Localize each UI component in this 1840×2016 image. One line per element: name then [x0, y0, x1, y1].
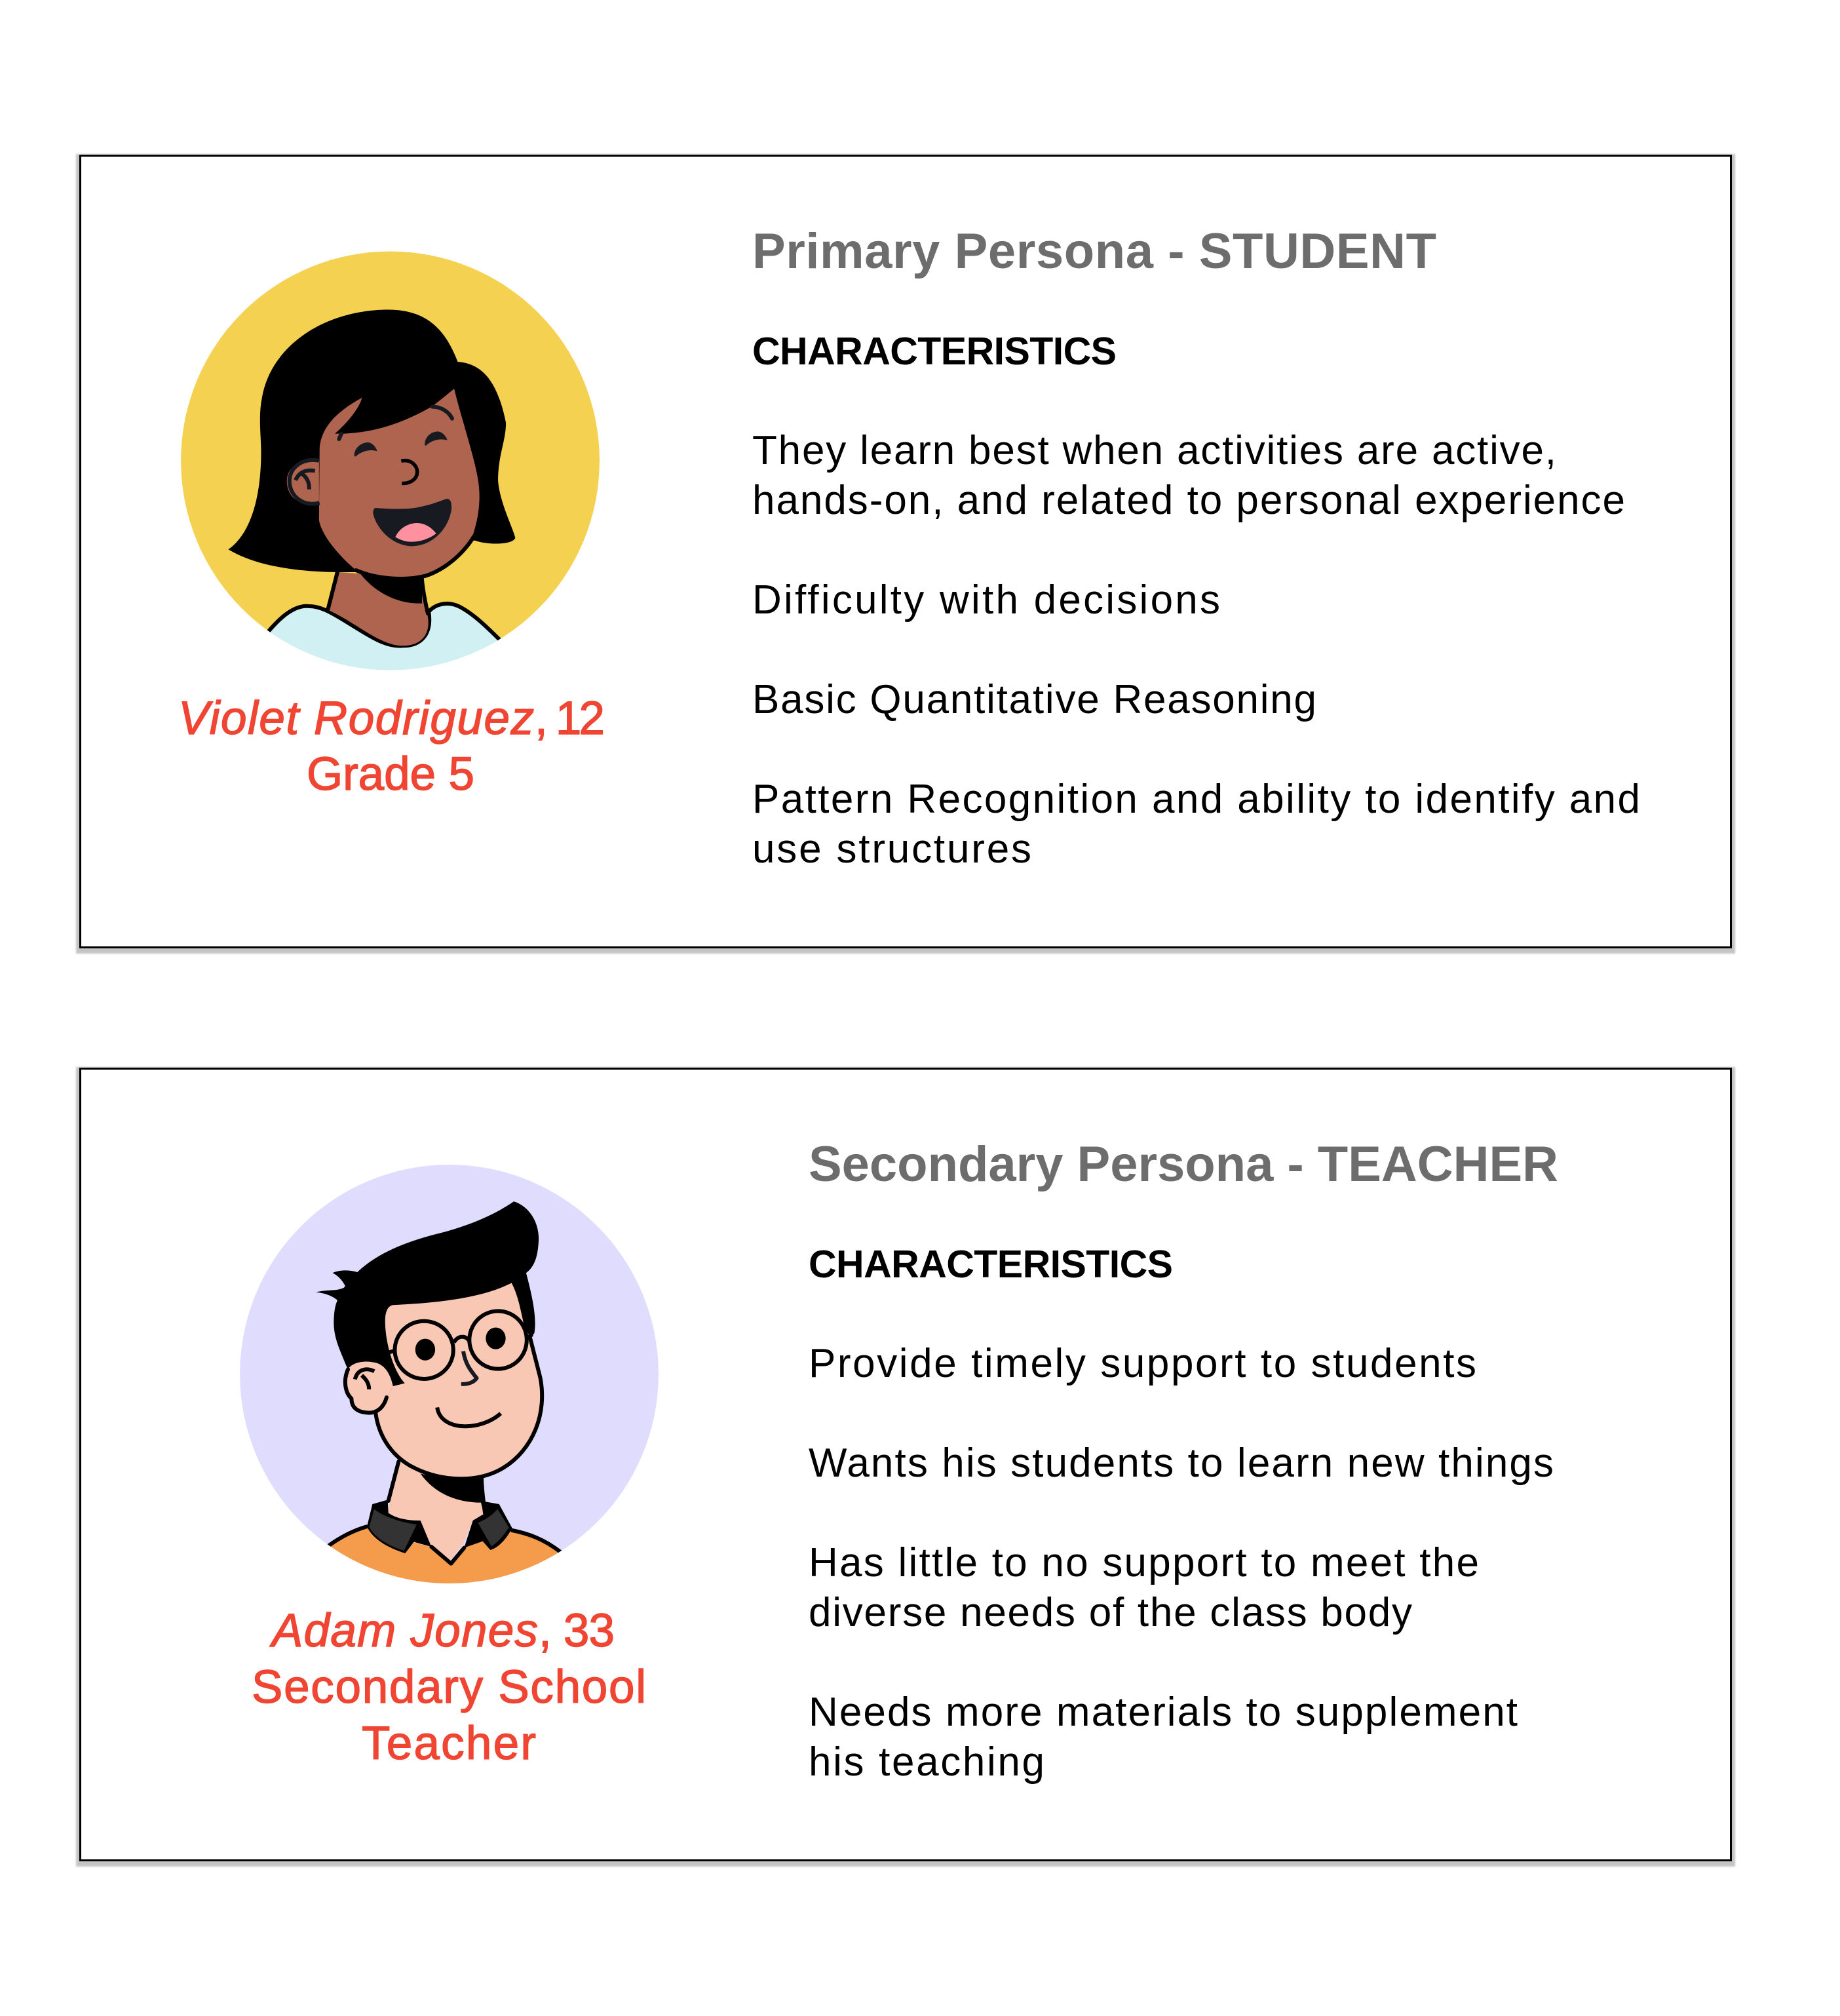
characteristic: active learning: They learn best when activities are active,	[752, 428, 1556, 473]
characteristic: little support	[809, 1540, 1479, 1635]
characteristic: active learning	[752, 428, 1625, 523]
avatar: Adam	[240, 1165, 659, 1599]
characteristic: pattern recognition: use structures	[752, 826, 1031, 872]
characteristic: pattern recognition: Pattern Recognition and ability to identify and	[752, 777, 1640, 822]
panel: primary persona student	[76, 154, 1735, 954]
heading: primary persona: Primary Persona - STUDENT	[752, 223, 1436, 279]
characteristic: decisions: Difficulty with decisions	[752, 577, 1220, 623]
characteristic: active learning: hands-on, and related to personal experience	[752, 478, 1625, 523]
name: Adam Jones: Teacher	[362, 1718, 536, 1770]
name: Adam Jones: Secondary School	[252, 1661, 646, 1713]
name: Adam Jones	[252, 1605, 646, 1770]
avatar: Violet	[181, 252, 600, 689]
characteristic: little support: Has little to no support to meet the	[809, 1540, 1479, 1585]
characteristic: little support: diverse needs of the class body	[809, 1590, 1412, 1635]
name: Violet Rodriguez: Violet Rodriguez	[178, 693, 534, 745]
card shadow	[76, 154, 1735, 954]
characteristic: pattern recognition	[752, 777, 1640, 872]
name: Adam Jones: , 33	[539, 1605, 615, 1657]
characteristic: more materials: his teaching	[809, 1739, 1045, 1785]
name: Violet Rodriguez: Grade 5	[307, 748, 474, 800]
name: Violet Rodriguez	[178, 693, 605, 800]
name: Adam Jones: Adam Jones	[269, 1605, 538, 1657]
subheading: characteristics: CHARACTERISTICS	[809, 1243, 1173, 1286]
card frame	[80, 156, 1731, 948]
characteristic: more materials: Needs more materials to supplement	[809, 1690, 1518, 1735]
panel: secondary persona teacher	[76, 1067, 1735, 1867]
card frame	[80, 1068, 1731, 1860]
characteristic: quantitative reasoning: Basic Quantitative Reasoning	[752, 677, 1316, 722]
characteristic: new things: Wants his students to learn new things	[809, 1441, 1554, 1486]
characteristic: more materials	[809, 1690, 1518, 1785]
characteristic: timely support: Provide timely support to students	[809, 1341, 1476, 1386]
heading: secondary persona: Secondary Persona - TEACHER	[809, 1136, 1558, 1192]
card shadow	[76, 1067, 1735, 1867]
name: Violet Rodriguez: , 12	[535, 693, 605, 745]
subheading: characteristics: CHARACTERISTICS	[752, 330, 1117, 373]
